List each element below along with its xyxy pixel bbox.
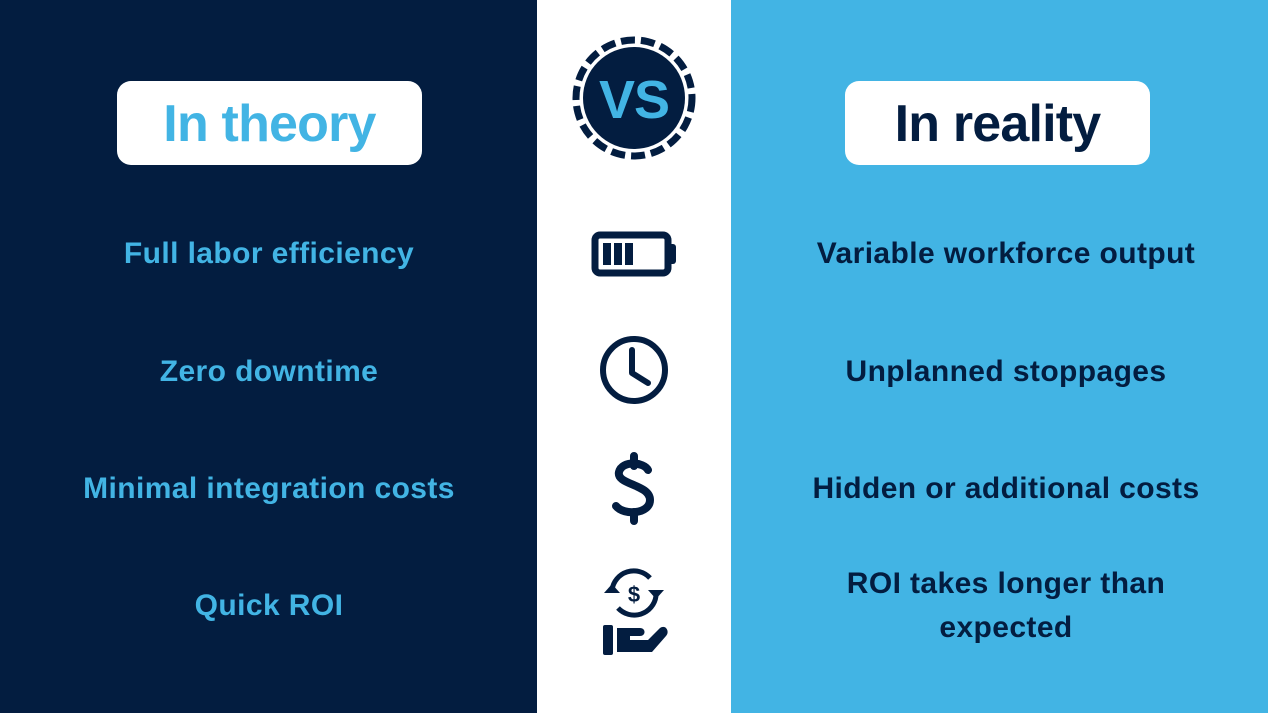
icon: money hand bbox=[603, 571, 668, 655]
icon: VS badge bbox=[576, 40, 692, 156]
icon: VS badge: VS bbox=[599, 70, 669, 130]
heading: in reality bbox=[845, 81, 1150, 165]
text: quick ROI: Quick ROI bbox=[195, 589, 343, 622]
panel: in theory bbox=[0, 0, 537, 713]
icon: battery bbox=[595, 235, 676, 273]
text: full labor efficiency: Full labor efficiency bbox=[124, 237, 414, 270]
text: minimal integration costs: Minimal integration costs bbox=[83, 472, 455, 505]
icon: dollar bbox=[616, 456, 650, 521]
text: variable workforce output: Variable workforce output bbox=[817, 237, 1195, 270]
heading: in theory: In theory bbox=[163, 95, 376, 153]
text: hidden costs: Hidden or additional costs bbox=[812, 472, 1200, 505]
text: ROI takes longer: expected bbox=[939, 611, 1073, 644]
icon: clock bbox=[603, 339, 665, 401]
text: zero downtime: Zero downtime bbox=[160, 355, 378, 388]
heading: in theory bbox=[117, 81, 422, 165]
icons column bbox=[572, 36, 696, 655]
heading: in reality: In reality bbox=[895, 95, 1100, 153]
text: unplanned stoppages: Unplanned stoppages bbox=[846, 355, 1166, 388]
panel: in reality bbox=[731, 0, 1268, 713]
text: ROI takes longer: ROI takes longer than bbox=[847, 567, 1165, 600]
text: ROI takes longer bbox=[847, 567, 1165, 644]
icon: money hand: $ bbox=[628, 582, 640, 607]
